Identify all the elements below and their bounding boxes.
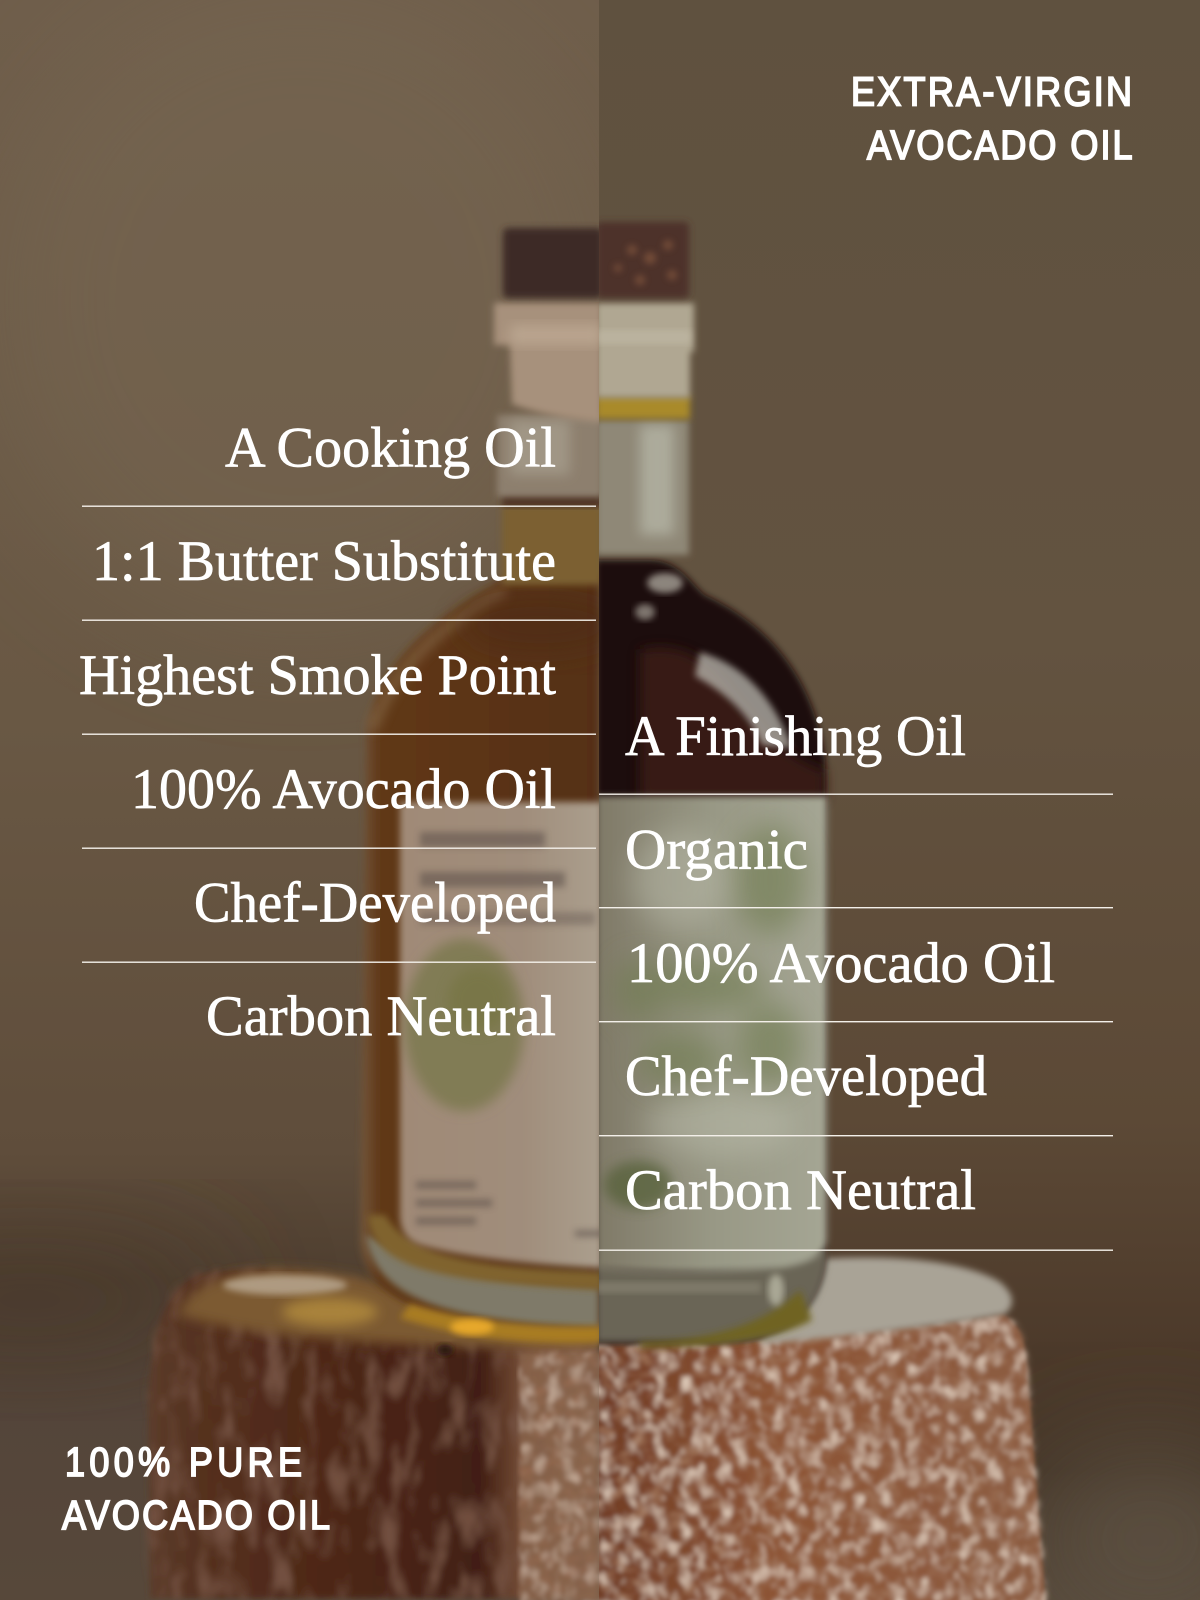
title: extra-virgin avocado oil: AVOCADO OIL <box>867 123 1132 168</box>
panel: right half, finishing oil photo <box>599 220 1200 1600</box>
panel: left half, cooking oil photo <box>0 0 620 1600</box>
list: cooking oil attributes: 1:1 Butter Substitute <box>92 530 556 593</box>
bottle: left amber bottle <box>360 228 620 1343</box>
object: right crusty bread stump <box>590 1257 1048 1600</box>
title: extra-virgin avocado oil <box>851 70 1132 168</box>
title: extra-virgin avocado oil: EXTRA-VIRGIN <box>851 70 1132 115</box>
title: 100% pure avocado oil: AVOCADO OIL <box>62 1493 330 1538</box>
bottle: right dark bottle <box>596 222 827 1348</box>
list: cooking oil attributes: Chef-Developed <box>194 872 556 934</box>
list: cooking oil attributes: Carbon Neutral <box>206 985 556 1048</box>
background: left wall <box>0 0 620 1600</box>
title: 100% pure avocado oil <box>62 1440 330 1538</box>
background: right wall <box>617 1074 1200 1600</box>
list: finishing oil attributes: Carbon Neutral <box>625 1159 976 1222</box>
title: 100% pure avocado oil: 100% PURE <box>65 1440 302 1485</box>
list: cooking oil attributes: 100% Avocado Oil <box>131 758 556 821</box>
list: cooking oil attributes: A Cooking Oil <box>225 416 556 480</box>
list: finishing oil attributes: 100% Avocado Oil <box>627 932 1055 995</box>
list: finishing oil attributes: A Finishing Oil <box>625 705 966 768</box>
list: finishing oil attributes: Chef-Developed <box>625 1045 987 1108</box>
list: finishing oil attributes: Organic <box>625 818 808 882</box>
list: cooking oil attributes <box>79 416 596 1048</box>
list: finishing oil attributes <box>599 705 1113 1251</box>
list: cooking oil attributes: Highest Smoke Point <box>79 644 556 707</box>
object: left crusty bread stump <box>146 1268 599 1600</box>
object: crumb highlights on left bread <box>518 1352 608 1600</box>
